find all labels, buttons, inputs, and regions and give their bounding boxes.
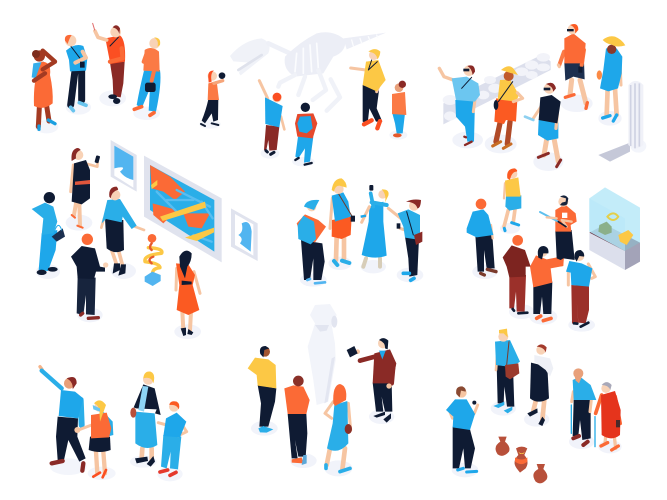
- person: man in orange shirt and dark shorts: [558, 24, 593, 112]
- person: photographer: [199, 71, 225, 129]
- helix sculpture on blue cube: [145, 234, 162, 286]
- person: guide with tablet and beard: [540, 195, 577, 260]
- person: woman in black dress taking photo: [66, 148, 100, 231]
- stone wall: [443, 53, 551, 124]
- scene: tourists with phones, centre: [297, 178, 423, 287]
- person: elderly man with cane: [569, 368, 596, 449]
- person: woman with yellow hat and orange skirt: [328, 178, 355, 270]
- person: man in orange shirt pointing up: [93, 23, 126, 106]
- person: visitor in blue suit with handbag: [32, 192, 65, 279]
- person: blonde woman with black handbag: [133, 37, 160, 120]
- person: woman in orange dress: [32, 50, 58, 133]
- dinosaur skeleton exhibit: [230, 32, 386, 111]
- person: man with red cap and satchel: [388, 199, 423, 282]
- person: man in dark red sweater: [503, 235, 534, 319]
- person: man in black sweater: [71, 234, 108, 322]
- scene: statue viewing, bottom centre: [248, 304, 396, 476]
- person: man in black tee with water bottle: [525, 83, 563, 171]
- person: father in blue shirt pointing up: [40, 367, 87, 475]
- person: boy in blue shirt pointing: [259, 81, 284, 159]
- person: man in orange shirt from behind: [284, 376, 317, 468]
- person: visitor in blue tee taking photo: [446, 386, 478, 477]
- person: bearded man with yellow hat: [485, 66, 523, 153]
- scene: ruins tour, top right: [439, 24, 646, 171]
- person: girl with bun and glasses: [389, 81, 407, 140]
- person: mother in black cardigan and blue skirt: [130, 372, 161, 468]
- scene: visitors looking up, top left: [32, 23, 160, 133]
- person: girl in yellow top and blue shorts: [500, 168, 521, 234]
- person: blond man with shoulder bag: [491, 329, 520, 416]
- scene: family, bottom left: [40, 367, 187, 481]
- white statue of torso: [308, 304, 337, 405]
- person: woman in blue dress with red hair: [324, 384, 352, 476]
- person: girl with glasses and backpack: [78, 400, 116, 480]
- person: woman guide in yellow shirt: [351, 49, 386, 128]
- framed portrait right: [231, 208, 258, 261]
- ancient clay vases: [496, 437, 547, 483]
- scene: art gallery: [32, 140, 258, 339]
- person: man in blue hoodie: [467, 199, 498, 279]
- person: man in blue shirt with lanyard: [65, 35, 91, 115]
- person: guide in maroon cardigan with tablet: [347, 338, 396, 424]
- person: woman in orange dress with long black hair: [174, 251, 201, 339]
- framed portrait left: [111, 140, 137, 192]
- large abstract painting: [144, 156, 222, 262]
- person: guide in light blue: [439, 65, 483, 148]
- person: elderly woman in red dress: [596, 382, 622, 453]
- person: woman in blue dress with sun hat: [597, 36, 625, 126]
- person: tourist with blue cap and backpack: [297, 200, 327, 287]
- person: woman guide in blue blouse and black skirt: [101, 187, 144, 279]
- column ruin: [598, 81, 646, 162]
- scene: artefact display, right: [467, 168, 640, 332]
- person: man in bright blue tee: [566, 250, 595, 332]
- person: boy holding mother's hand: [157, 401, 187, 481]
- scene: pottery and seniors, bottom right: [446, 329, 622, 483]
- person: woman in orange jacket: [529, 246, 564, 325]
- person: woman in long blue dress: [361, 185, 389, 273]
- glass display case with gold artefacts: [589, 187, 640, 270]
- person: man in yellow sweater: [248, 346, 278, 436]
- person: child with blue backpack: [292, 103, 317, 166]
- person: woman in black dress and white blouse: [524, 344, 553, 427]
- scene: dinosaur skeleton: [199, 32, 407, 166]
